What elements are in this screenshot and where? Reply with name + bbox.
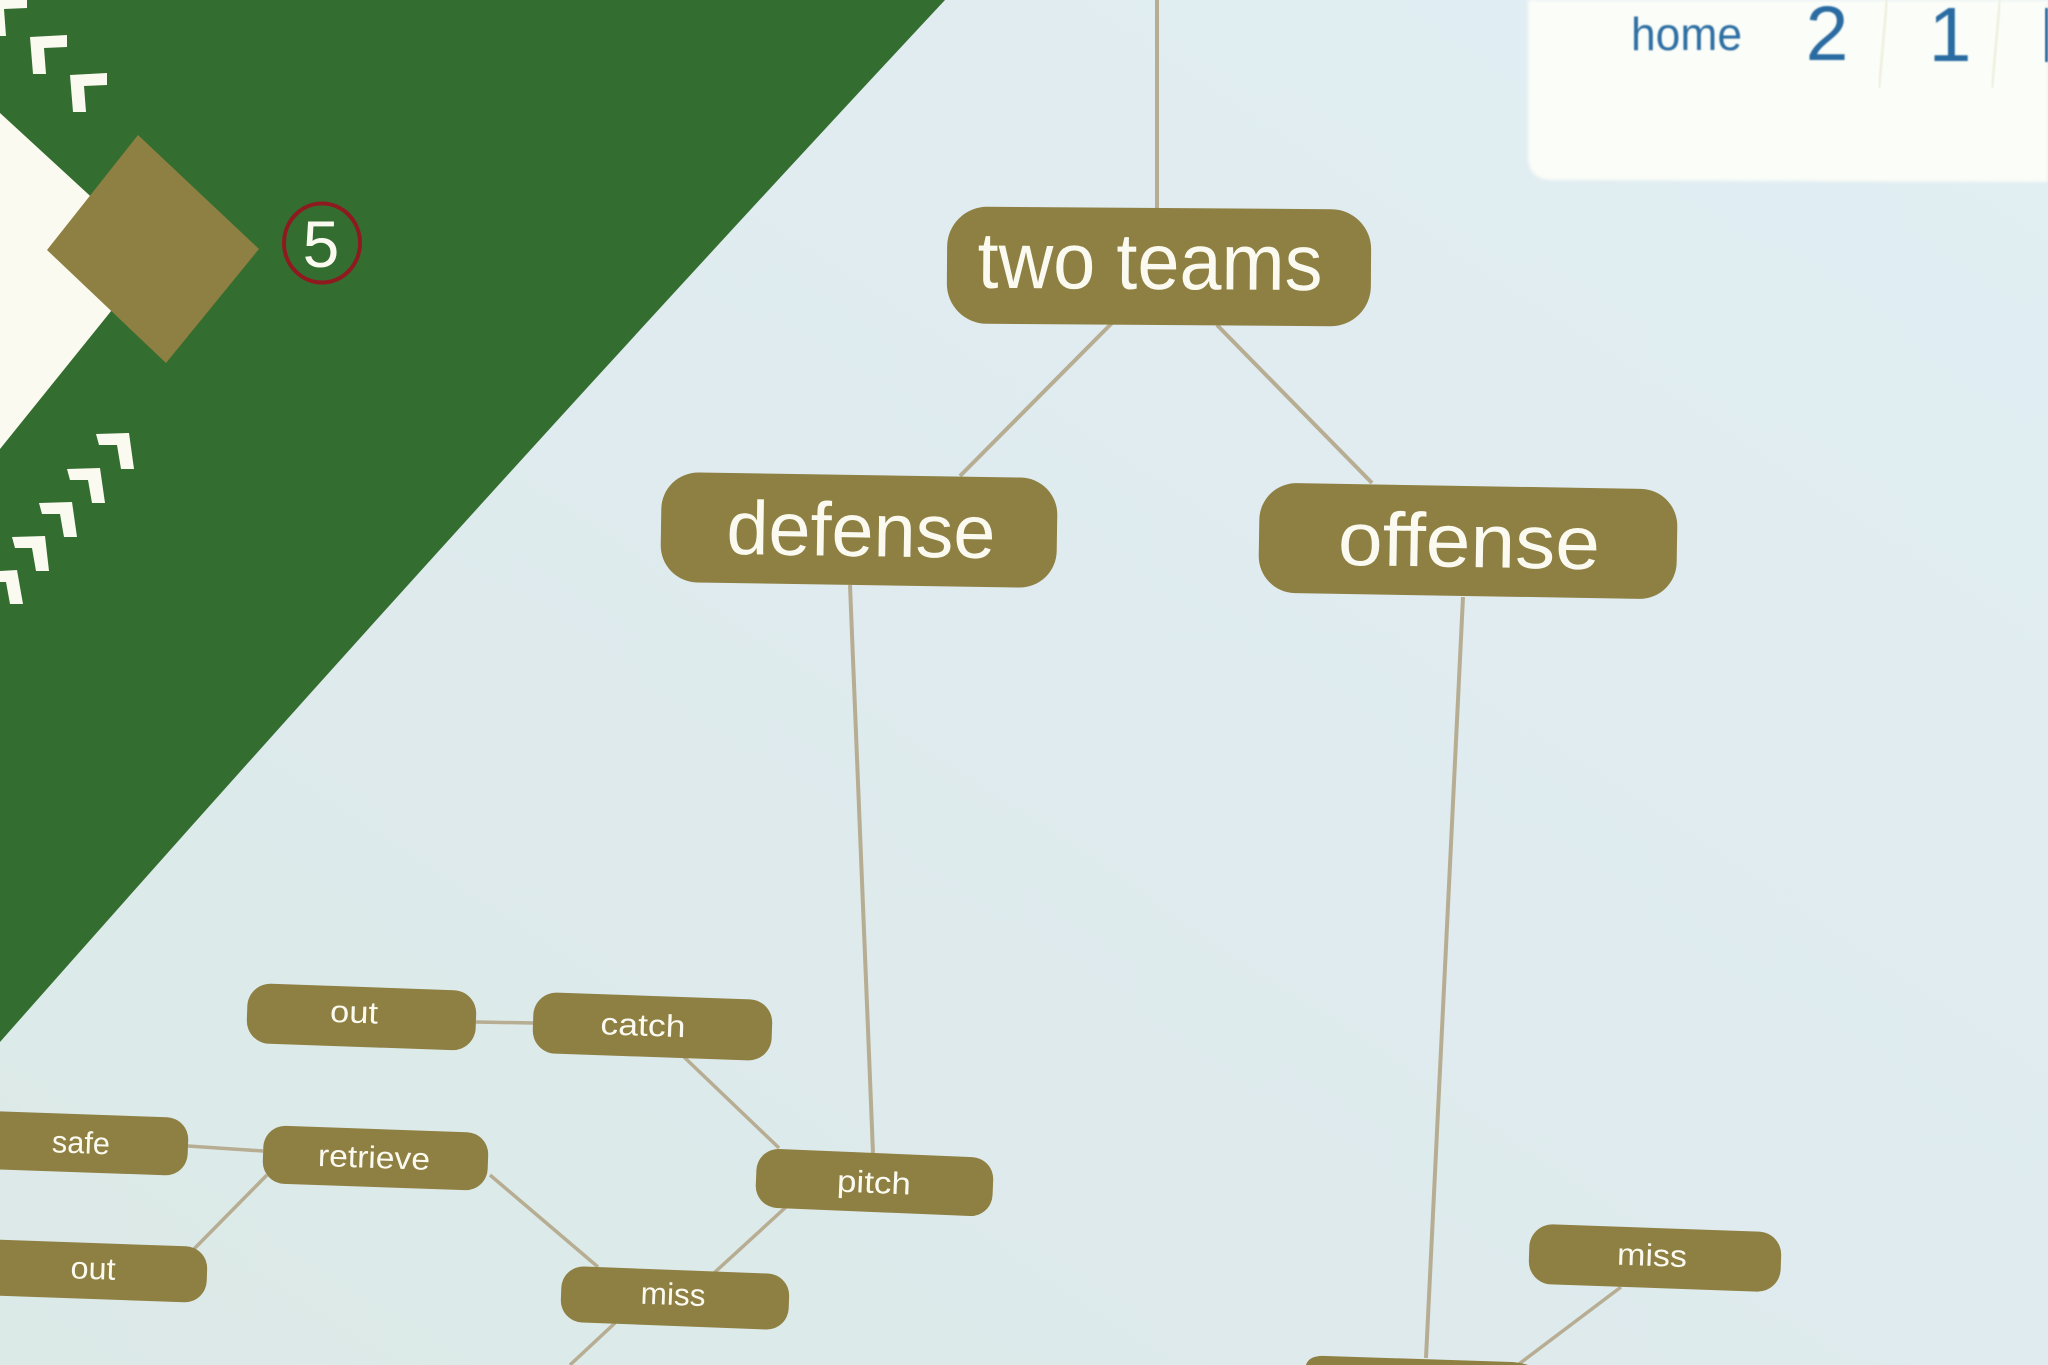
node: safe bbox=[0, 1110, 189, 1176]
node: miss (defense branch) bbox=[560, 1266, 790, 1330]
node: two teams: two teams bbox=[977, 216, 1323, 307]
connectors between nodes bbox=[188, 0, 1621, 1365]
node: out (after retrieve) bbox=[0, 1239, 208, 1303]
node: pitch bbox=[755, 1148, 994, 1217]
node: out (after retrieve): out bbox=[70, 1250, 117, 1287]
node: offense: offense bbox=[1337, 497, 1601, 586]
node: cut-off box at bottom edge bbox=[1306, 1356, 1528, 1365]
home plate shape bbox=[0, 113, 120, 449]
node: miss (defense branch): miss bbox=[640, 1276, 706, 1313]
scoreboard label: home: home bbox=[1631, 8, 1742, 60]
icon: tan base diamond bbox=[47, 135, 259, 363]
node: catch bbox=[532, 992, 773, 1061]
node: catch: catch bbox=[600, 1006, 686, 1044]
upper baseline chevrons bbox=[0, 0, 107, 112]
lower baseline chevrons bbox=[0, 433, 134, 604]
node: defense: defense bbox=[726, 486, 996, 575]
numbered circle: 5: 5 bbox=[303, 207, 339, 281]
node: out (after catch) bbox=[246, 983, 477, 1051]
node: pitch: pitch bbox=[836, 1163, 912, 1202]
node: offense bbox=[1258, 483, 1678, 599]
numbered circle: 5 bbox=[284, 204, 360, 282]
score digit: cut-off at page edge bbox=[2045, 8, 2048, 62]
node: two teams bbox=[947, 207, 1371, 326]
node: miss (offense branch): miss bbox=[1616, 1237, 1688, 1274]
node: retrieve: retrieve bbox=[317, 1138, 431, 1177]
panel: scoreboard card bbox=[1528, 0, 2048, 182]
panel: green infield wedge bbox=[0, 0, 945, 1042]
node: retrieve bbox=[262, 1125, 489, 1191]
node: defense bbox=[660, 472, 1058, 588]
node: out (after catch): out bbox=[330, 994, 379, 1031]
node: safe: safe bbox=[51, 1124, 111, 1161]
node: miss (offense branch) bbox=[1528, 1224, 1782, 1292]
